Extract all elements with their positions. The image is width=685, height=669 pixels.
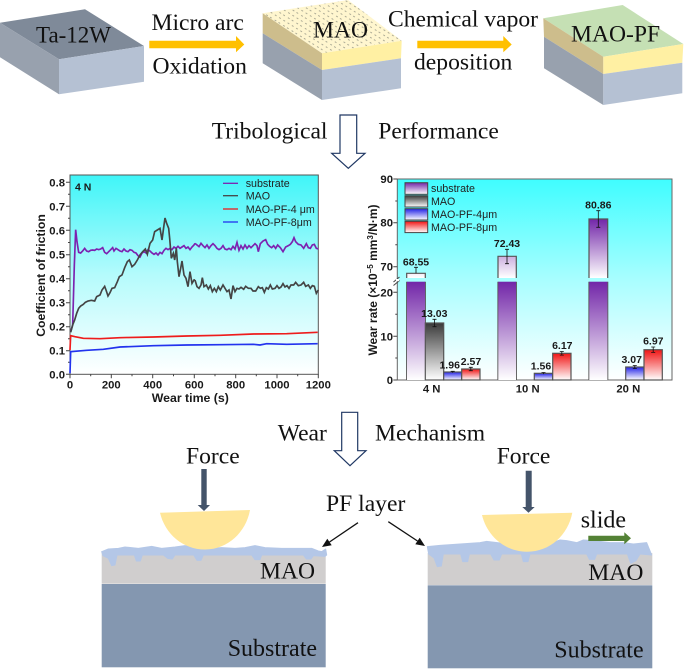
process label: Micro arc Oxidation: Oxidation — [152, 53, 247, 79]
diagram: sliding wear mechanism — [427, 443, 652, 668]
heading: Tribological Performance: Tribological — [212, 118, 328, 144]
layer: substrate right — [428, 585, 652, 668]
load label: 4 N: 4 N — [75, 182, 91, 194]
value labels: 6.97 — [643, 335, 664, 347]
chart: coefficient of friction — [34, 175, 331, 405]
y axis labels — [380, 174, 393, 387]
x axis labels — [67, 380, 331, 392]
value labels: 3.07 — [621, 354, 642, 366]
legend: wear rate bars — [405, 183, 497, 234]
label: PF layer: PF layer — [326, 491, 405, 517]
legend: friction curves: MAO-PF-4 μm — [246, 204, 315, 216]
label: MAO right: MAO — [588, 560, 643, 586]
value labels: 72.43 — [494, 238, 520, 250]
x axis labels: 1200 — [306, 380, 331, 392]
curve: MAO-PF-4 red — [70, 332, 318, 350]
legend: wear rate bars: MAO-PF-4μm — [431, 209, 497, 221]
chart: wear rate — [366, 174, 672, 396]
heading: Wear Mechanism: Mechanism — [375, 421, 485, 447]
label: Force right: Force — [497, 443, 550, 469]
arrow: force right — [522, 471, 535, 513]
y axis labels: 0.5 — [49, 250, 65, 262]
value labels — [403, 199, 664, 373]
x axis labels: 200 — [102, 380, 121, 392]
axis title: wear rate: /N·m) — [366, 204, 380, 235]
arrow: micro arc oxidation — [149, 36, 244, 52]
ball: left counter body — [160, 510, 250, 550]
y axis labels: 10 — [380, 331, 393, 343]
heading: Wear Mechanism — [278, 421, 485, 447]
legend: friction curves: MAO-PF-8μm — [246, 217, 312, 229]
x axis labels: 600 — [185, 380, 204, 392]
arrow: chemical vapor deposition — [417, 36, 512, 52]
error bars — [414, 211, 655, 374]
block: MAO-PF — [543, 5, 683, 105]
legend: wear rate bars: MAO — [431, 196, 455, 208]
y axis labels: 0.8 — [49, 177, 65, 189]
curve: substrate purple right part — [195, 238, 318, 252]
arrow: force left — [198, 469, 210, 511]
axis title: wear rate: Wear rate (×10 — [366, 273, 380, 356]
axis break mark — [394, 277, 400, 286]
x axis labels: 400 — [143, 380, 162, 392]
block: Ta-12W — [0, 9, 144, 94]
label: Substrate left: Substrate — [228, 636, 317, 662]
y axis labels: 0.3 — [49, 298, 65, 310]
label: Substrate right: Substrate — [554, 637, 644, 663]
y axis labels: 80 — [380, 218, 393, 230]
label: slide: slide — [581, 508, 626, 534]
layer: PF film right — [427, 540, 652, 567]
bars: 10 N — [498, 256, 571, 380]
value labels: 80.86 — [585, 199, 612, 211]
legend: wear rate bars: substrate — [431, 183, 475, 195]
curve: substrate purple left part — [71, 230, 195, 332]
value labels: 1.56 — [531, 361, 551, 373]
arrow: hollow down to mechanism — [334, 412, 366, 466]
layer: MAO right — [428, 553, 652, 585]
legend: friction curves: substrate — [246, 178, 290, 190]
y axis labels: 0.2 — [49, 322, 65, 334]
y axis labels: 0.4 — [49, 274, 66, 286]
process label: Chemical vapor deposition: Chemical vapor — [388, 7, 538, 33]
block: MAO-PF: MAO-PF — [571, 22, 660, 48]
process label: Chemical vapor deposition — [388, 7, 538, 75]
arrow: slide — [588, 532, 631, 544]
curve: MAO dark gray left part — [71, 218, 195, 332]
curve: MAO-PF-8 blue — [70, 344, 318, 373]
block: Ta-12W: Ta-12W — [36, 23, 111, 48]
arrow: hollow down to charts — [332, 115, 365, 168]
y axis labels: 0.1 — [49, 346, 65, 358]
diagram: static wear mechanism — [102, 443, 327, 667]
value labels: 68.55 — [403, 256, 429, 268]
value labels: 6.17 — [552, 340, 573, 352]
x axis labels: 1000 — [264, 380, 290, 392]
bars: 20 N — [589, 219, 662, 380]
y axis labels: 90 — [380, 174, 393, 186]
legend: wear rate bars: MAO-PF-8μm — [431, 222, 497, 234]
y axis labels: 0.7 — [49, 201, 65, 213]
legend: friction curves: MAO — [246, 190, 270, 202]
axis title: wear time: Wear time (s) — [152, 391, 229, 405]
layer: substrate left — [102, 584, 326, 667]
x axis labels: 20 N — [616, 384, 640, 396]
legend: friction curves — [223, 178, 315, 229]
bars: 4 N — [407, 273, 480, 380]
x axis labels: 800 — [226, 380, 245, 392]
axis title: coefficient of friction: Coefficient of friction — [34, 214, 48, 337]
layer: MAO left — [102, 551, 326, 584]
heading: Wear Mechanism: Wear — [278, 421, 327, 447]
axis title: wear rate: 3 — [366, 235, 375, 240]
heading: Tribological Performance — [212, 118, 499, 144]
x axis labels: 4 N — [423, 384, 440, 396]
y axis labels: 0.6 — [49, 225, 65, 237]
ball: right counter body — [482, 513, 572, 552]
y axis labels: 0 — [387, 375, 393, 387]
y axis labels: 20 — [380, 287, 393, 299]
value labels: 1.96 — [439, 360, 460, 372]
value labels: 13.03 — [421, 308, 448, 320]
process label: Micro arc Oxidation: Micro arc — [152, 10, 244, 36]
x axis labels: 10 N — [516, 384, 540, 396]
label: MAO left: MAO — [260, 558, 315, 584]
arrow: PF layer to left film — [322, 523, 358, 547]
layer: PF film left — [102, 546, 327, 566]
y axis labels — [49, 177, 66, 381]
label: Force left: Force — [186, 443, 240, 469]
axis title: wear rate: mm — [366, 240, 380, 264]
x axis labels: 0 — [67, 380, 73, 392]
heading: Tribological Performance: Performance — [378, 118, 499, 144]
process label: Micro arc Oxidation — [152, 10, 247, 79]
curve: MAO dark gray right part — [195, 278, 318, 299]
y axis labels: 70 — [380, 262, 393, 274]
x axis labels — [423, 384, 640, 396]
process label: Chemical vapor deposition: deposition — [414, 49, 513, 75]
block: MAO: MAO — [313, 18, 368, 44]
axis title: wear rate: −5 — [366, 264, 375, 273]
value labels: 2.57 — [461, 356, 481, 368]
arrow: PF layer to right film — [388, 522, 425, 546]
block: MAO — [263, 0, 402, 100]
y axis labels: 0.0 — [49, 369, 65, 381]
